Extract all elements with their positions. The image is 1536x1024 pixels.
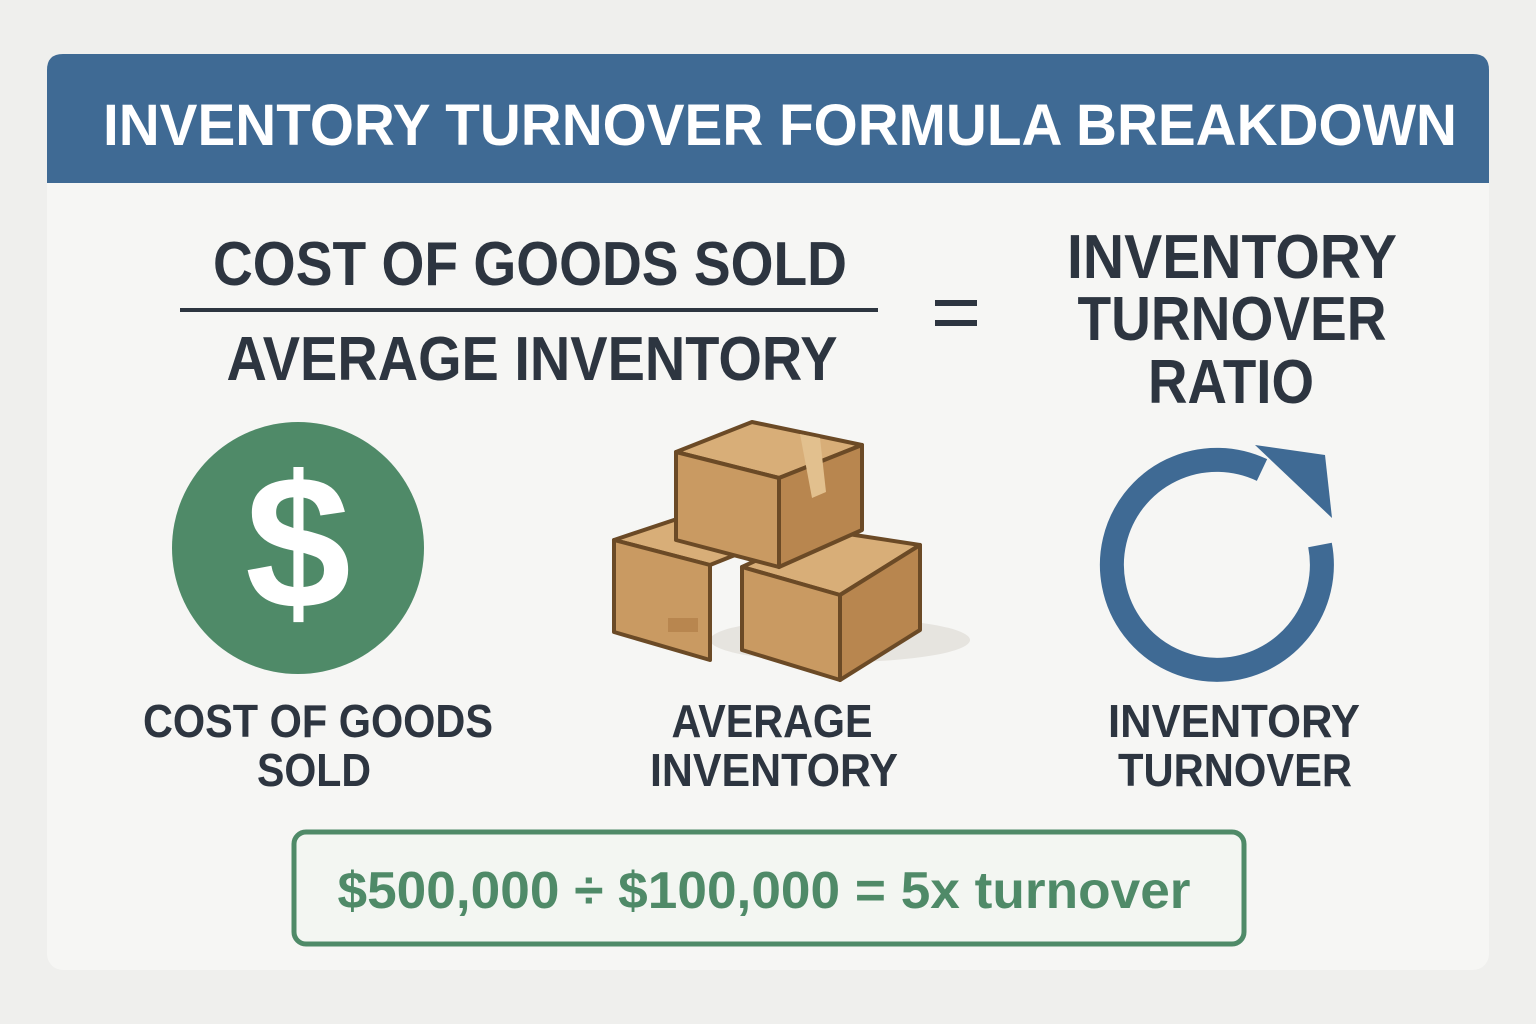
formula result: TURNOVER: [1078, 285, 1386, 354]
icon: refresh arrow: [1112, 445, 1332, 670]
label: inventory turnover: [1108, 695, 1360, 796]
callout: example calculation: $500,000 ÷ $100,000 = 5x turnover: [338, 862, 1190, 920]
title: INVENTORY TURNOVER FORMULA BREAKDOWN: [103, 93, 1457, 158]
formula result: [1067, 223, 1397, 417]
formula result: RATIO: [1148, 348, 1314, 417]
label: cost of goods sold: COST OF GOODS: [143, 695, 493, 747]
callout: example calculation: [294, 832, 1244, 944]
equals sign: [935, 300, 977, 326]
header band: [47, 54, 1489, 183]
formula: fraction: COST OF GOODS SOLD: [213, 230, 847, 299]
icon: dollar coin: $: [245, 437, 351, 649]
formula result: INVENTORY: [1067, 223, 1397, 292]
icon: dollar coin: [172, 422, 424, 674]
label: inventory turnover: TURNOVER: [1118, 744, 1352, 796]
icon: boxes: [614, 422, 970, 680]
label: average inventory: [650, 695, 898, 796]
formula: fraction: [180, 230, 878, 394]
label: average inventory: INVENTORY: [650, 744, 898, 796]
label: inventory turnover: INVENTORY: [1108, 695, 1360, 747]
label: average inventory: AVERAGE: [672, 695, 872, 747]
label: cost of goods sold: [143, 695, 493, 796]
label: cost of goods sold: SOLD: [257, 744, 371, 796]
formula: fraction: AVERAGE INVENTORY: [226, 325, 838, 394]
